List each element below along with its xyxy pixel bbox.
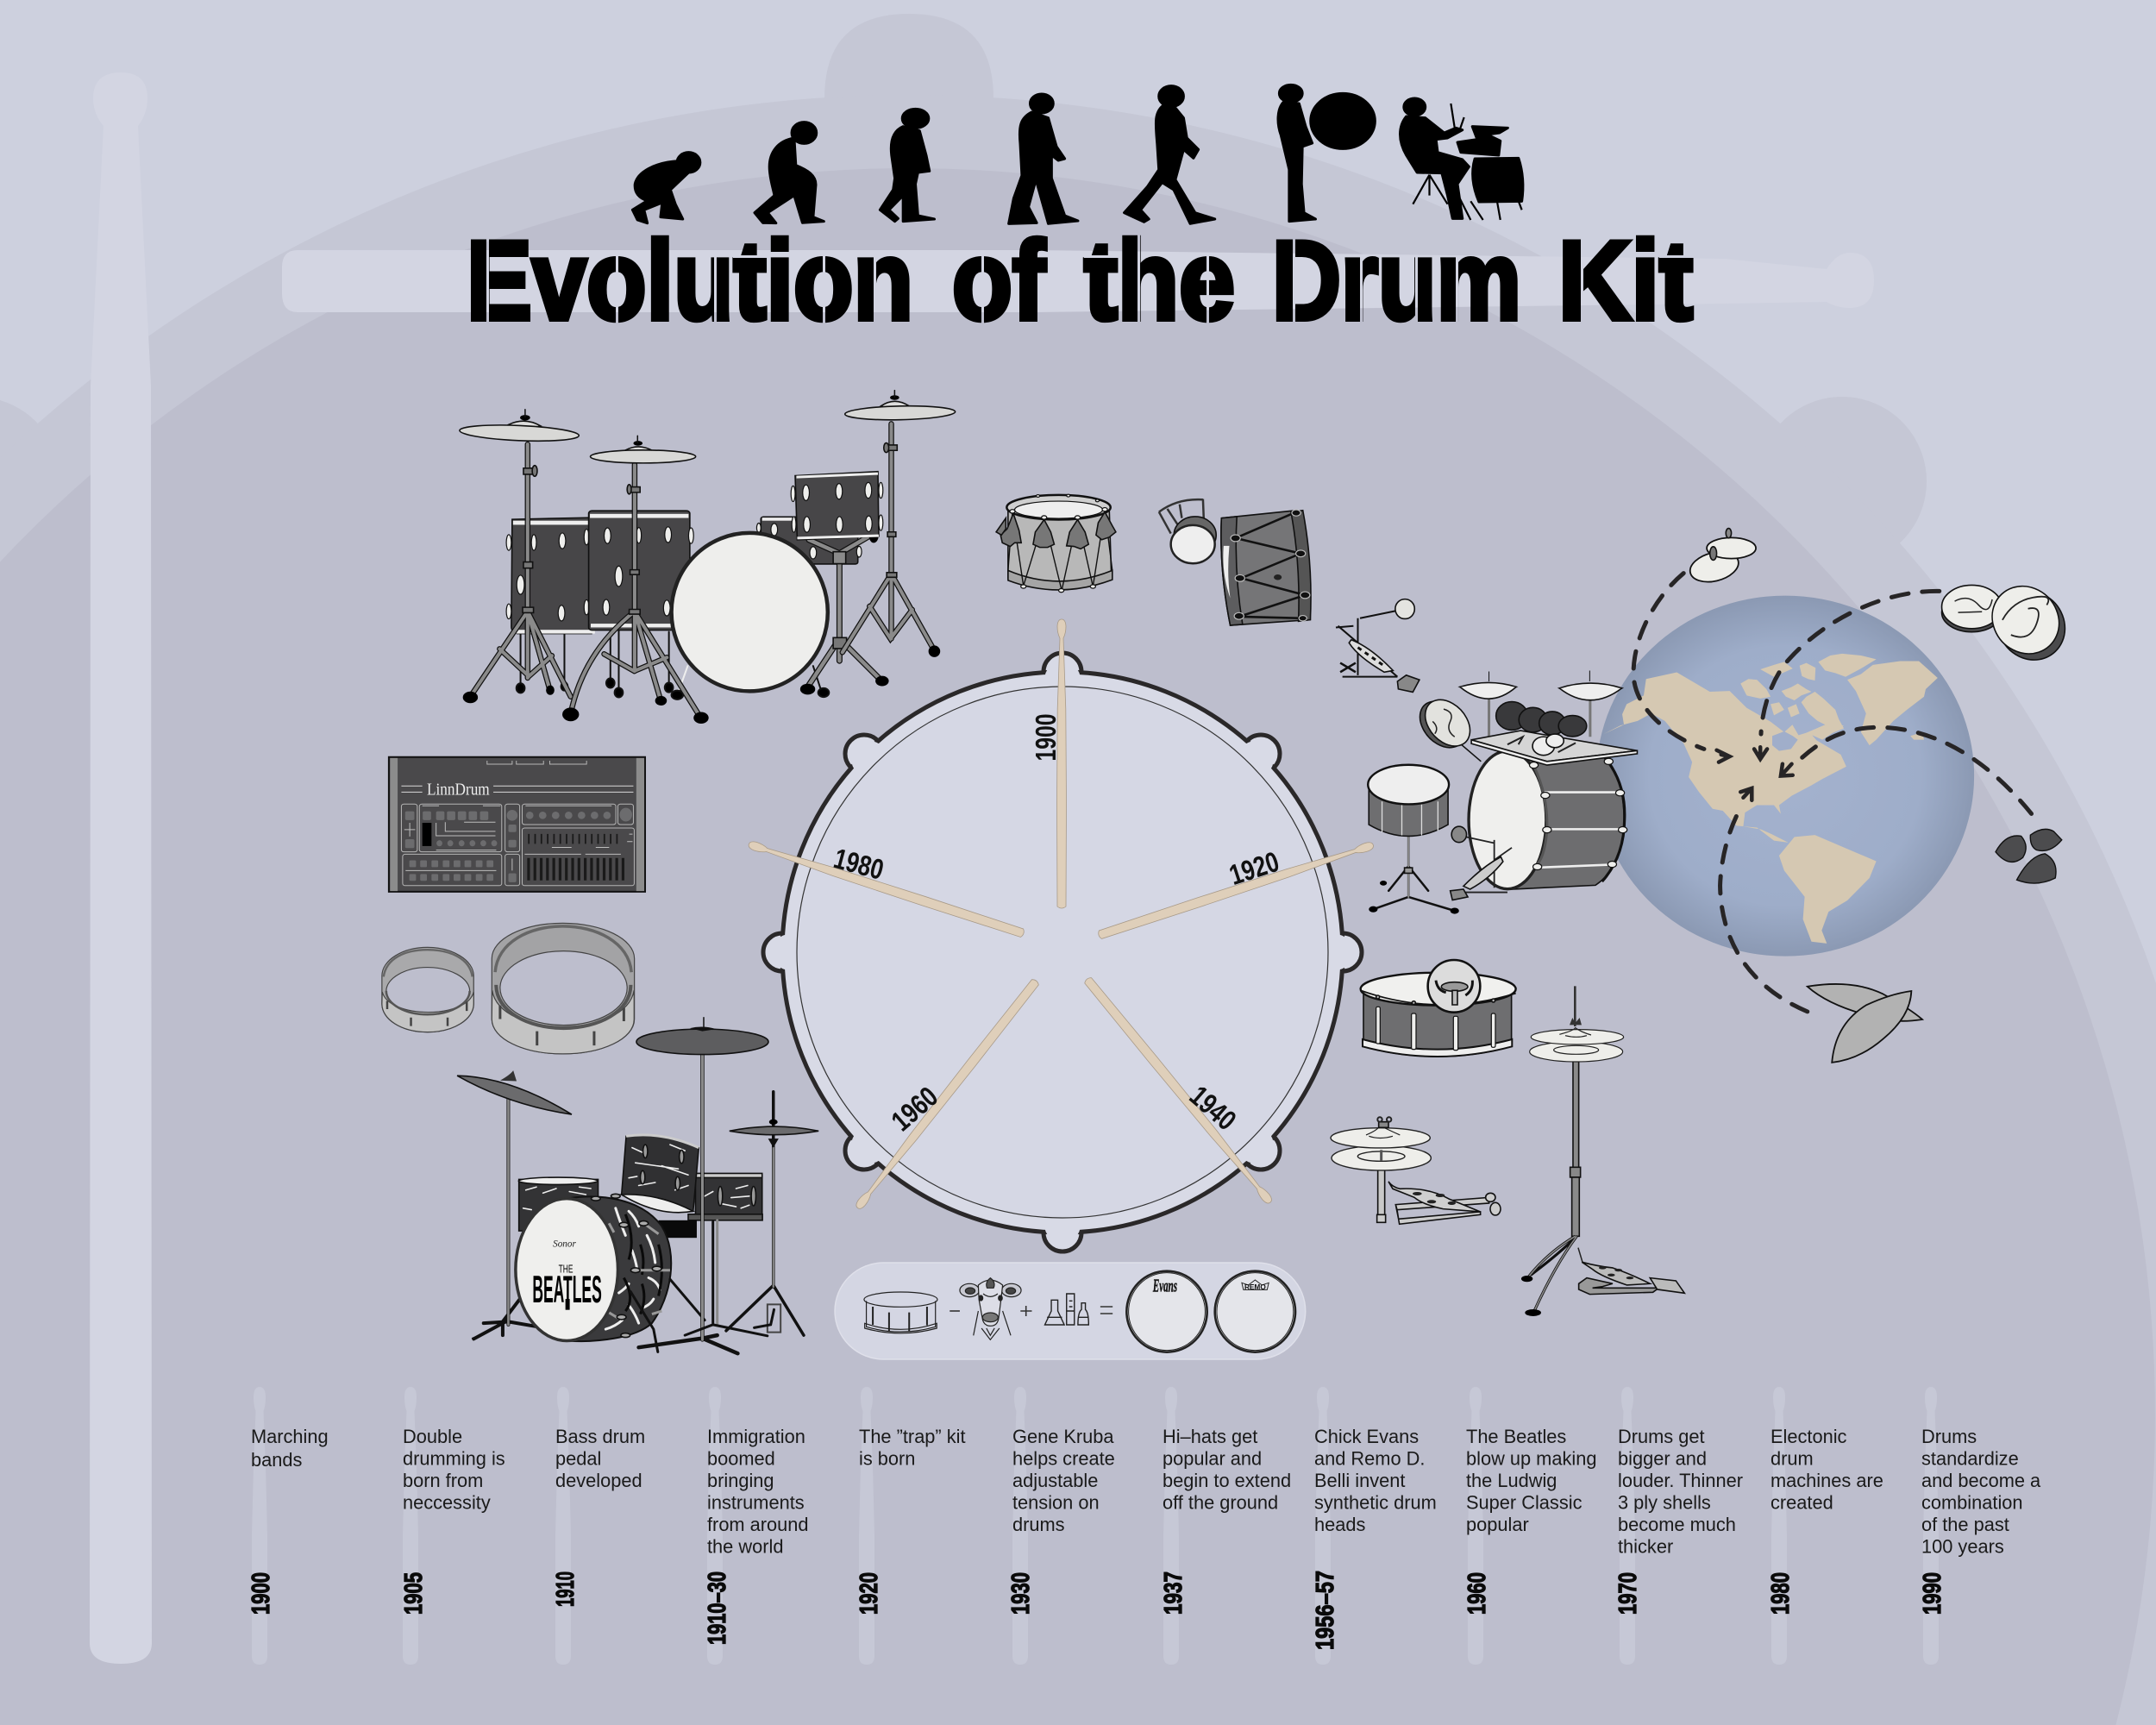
timeline item 1960: popular bbox=[1466, 1514, 1529, 1535]
equals bbox=[1100, 1307, 1112, 1314]
timeline item 1937: popular and bbox=[1163, 1447, 1262, 1470]
faded horizontal drumstick bbox=[282, 250, 1874, 312]
timeline item 1920: The ”trap” kit bbox=[859, 1426, 966, 1447]
icon: snare bbox=[864, 1292, 937, 1333]
pill background bbox=[835, 1263, 1306, 1359]
title: Drum bbox=[1272, 217, 1521, 343]
timeline item 1905: 1905 bbox=[400, 1572, 428, 1615]
bass drum pedal bbox=[1336, 599, 1420, 692]
timeline item 1910-30 bbox=[704, 1387, 809, 1665]
timeline item 1910-30: 1910–30 bbox=[704, 1571, 731, 1645]
bass drum shell bbox=[567, 1194, 705, 1352]
floor tom right bbox=[589, 511, 693, 630]
small drum bbox=[1171, 517, 1216, 563]
year label 1900: 1900 bbox=[1030, 714, 1062, 761]
drum skin bbox=[797, 687, 1328, 1218]
timeline item 1970: thicker bbox=[1618, 1535, 1673, 1558]
timeline item 1980 bbox=[1767, 1387, 1883, 1665]
title bbox=[471, 235, 1694, 323]
timeline item 1920: is born bbox=[859, 1447, 915, 1470]
synthetic heads equation bbox=[835, 1263, 1306, 1359]
timeline item 1920 bbox=[856, 1387, 966, 1665]
timeline item 1960 bbox=[1463, 1387, 1596, 1665]
timeline item 1960: 1960 bbox=[1463, 1572, 1491, 1615]
timeline item 1905: neccessity bbox=[403, 1492, 491, 1513]
tambourine coins bbox=[1942, 574, 2075, 672]
timeline item 1956-57: and Remo D. bbox=[1314, 1447, 1425, 1470]
icon: cow bbox=[960, 1278, 1021, 1339]
timeline item 1970: louder. Thinner bbox=[1618, 1470, 1743, 1491]
timeline item 1910-30: bringing bbox=[707, 1470, 774, 1491]
silhouette: seated kit drummer bbox=[1401, 98, 1523, 220]
year label 1980: 1980 bbox=[830, 842, 887, 886]
timeline item 1910 bbox=[552, 1387, 645, 1665]
stick 1900 bbox=[1057, 619, 1066, 908]
timeline item 1910-30: boomed bbox=[707, 1447, 775, 1470]
silhouette: early human bbox=[880, 109, 935, 222]
land: Greenland bbox=[1847, 661, 1938, 745]
timeline item 1990: and become a bbox=[1921, 1470, 2041, 1491]
small pedal on bass drum bbox=[1451, 826, 1512, 900]
trap kit bbox=[1368, 670, 1637, 914]
globe with immigration routes bbox=[1596, 529, 2075, 1063]
silhouette: marching bass drummer bbox=[1278, 85, 1375, 222]
timeline item 1956-57 bbox=[1312, 1387, 1437, 1665]
timeline item 1937: 1937 bbox=[1160, 1571, 1188, 1615]
snare on stand bbox=[1368, 765, 1459, 914]
faded vertical drumstick bbox=[90, 72, 152, 1664]
left cymbal and stand bbox=[457, 1070, 572, 1339]
timeline item 1980: created bbox=[1771, 1492, 1833, 1513]
gray cymbals bbox=[1808, 984, 1922, 1063]
icon: beakers bbox=[1045, 1294, 1088, 1325]
timeline item 1970: 3 ply shells bbox=[1618, 1492, 1711, 1513]
land: South America bbox=[1779, 835, 1877, 944]
timeline item 1960: the Ludwig bbox=[1466, 1470, 1557, 1491]
drum machine: LinnDrum bbox=[389, 757, 645, 892]
land: Arctic islands bbox=[1740, 654, 1877, 733]
timeline item 1910-30: the world bbox=[707, 1535, 783, 1558]
timeline item 1910: pedal bbox=[555, 1447, 601, 1470]
timeline item 1980: Electonic bbox=[1771, 1426, 1847, 1447]
timeline item 1990: combination bbox=[1921, 1492, 2023, 1513]
timeline item 1910-30: from around bbox=[707, 1514, 809, 1535]
cymbal stand right bbox=[843, 391, 956, 657]
woodblocks bbox=[1496, 702, 1587, 737]
tom stand bbox=[800, 526, 889, 694]
timeline item 1990: 100 years bbox=[1921, 1535, 2004, 1558]
timeline item 1905 bbox=[400, 1387, 505, 1665]
timeline item 1970 bbox=[1614, 1387, 1743, 1665]
cymbals on bass drum bbox=[1460, 670, 1622, 737]
drum kit: modern rock kit bbox=[459, 391, 956, 724]
timeline item 1910: Bass drum bbox=[555, 1426, 645, 1447]
ride cymbal and stand bbox=[636, 1018, 768, 1353]
rim lugs bbox=[763, 653, 1362, 1251]
right tom bbox=[659, 1173, 762, 1325]
drum head: Evans bbox=[1126, 1271, 1207, 1352]
timeline item 1900: 1900 bbox=[248, 1572, 275, 1615]
sliders bbox=[528, 834, 620, 844]
timeline item 1956-57: Chick Evans bbox=[1314, 1426, 1419, 1447]
timeline item 1970: Drums get bbox=[1618, 1426, 1705, 1447]
timeline item 1937: off the ground bbox=[1163, 1492, 1278, 1513]
timeline item 1937: Hi–hats get bbox=[1163, 1426, 1257, 1447]
timeline item 1910-30: Immigration bbox=[707, 1426, 805, 1447]
small shell ring bbox=[382, 947, 473, 1032]
title: Evolution bbox=[467, 217, 913, 343]
timeline item 1970: become much bbox=[1618, 1514, 1736, 1535]
castanets bbox=[1996, 829, 2062, 883]
table top with traps bbox=[1471, 731, 1637, 765]
timeline item 1920: 1920 bbox=[856, 1572, 883, 1615]
timeline item 1956-57: 1956–57 bbox=[1312, 1571, 1339, 1650]
route from gray cymbals bbox=[1720, 788, 1808, 1012]
chair bbox=[1159, 499, 1204, 534]
crash cymbal stand middle bbox=[562, 436, 709, 724]
timeline item 1905: drumming is bbox=[403, 1447, 505, 1470]
route from finger cymbals bbox=[1633, 574, 1730, 762]
hi-hat stand bbox=[1521, 986, 1684, 1316]
drum head: Remo: REMO bbox=[1244, 1283, 1266, 1291]
rope bass drum bbox=[1221, 510, 1311, 625]
timeline item 1910: 1910 bbox=[552, 1571, 580, 1607]
year label 1960: 1960 bbox=[885, 1080, 943, 1137]
large shell ring bbox=[492, 923, 635, 1054]
title: Kit bbox=[1558, 217, 1693, 343]
title: the bbox=[1084, 217, 1235, 343]
timeline item 1980: machines are bbox=[1771, 1470, 1883, 1491]
timeline bbox=[248, 1387, 2041, 1665]
land: North America bbox=[1603, 673, 1846, 843]
globe bbox=[1596, 596, 1974, 957]
timeline item 1990 bbox=[1919, 1387, 2041, 1665]
tensioned snare drum with key bbox=[1361, 960, 1516, 1057]
floor tom left bbox=[506, 518, 595, 634]
timeline item 1990: of the past bbox=[1921, 1514, 2009, 1535]
magnified tension key bbox=[1428, 960, 1480, 1013]
rack tom bbox=[791, 472, 883, 540]
logo text: LinnDrum bbox=[427, 780, 490, 799]
tambourine bbox=[1412, 695, 1481, 762]
timeline item 1930: Gene Kruba bbox=[1012, 1426, 1114, 1447]
timeline item 1905: Double bbox=[403, 1426, 462, 1447]
stick 1920 bbox=[1097, 840, 1375, 940]
stick 1940 bbox=[1083, 976, 1274, 1206]
timeline item 1956-57: heads bbox=[1314, 1514, 1365, 1535]
drum head: Evans: Evans bbox=[1152, 1276, 1177, 1295]
buttons bbox=[405, 808, 632, 882]
timeline item 1956-57: Belli invent bbox=[1314, 1470, 1405, 1491]
timeline item 1930: tension on bbox=[1012, 1492, 1100, 1513]
stick 1980 bbox=[748, 840, 1025, 938]
silhouette: crouching ape bbox=[632, 153, 700, 223]
silhouette: walking human bbox=[1125, 86, 1215, 223]
timeline item 1990: standardize bbox=[1921, 1447, 2019, 1470]
large bass drum bbox=[1469, 750, 1627, 889]
drum kit: Beatles kit bbox=[457, 1018, 818, 1353]
timeline item 1980: drum bbox=[1771, 1447, 1814, 1470]
silhouette: upright human bbox=[1009, 94, 1078, 223]
timeline item 1905: born from bbox=[403, 1470, 483, 1491]
stick 1960 bbox=[854, 978, 1040, 1211]
finger cymbals bbox=[1688, 529, 1756, 586]
evolution silhouettes bbox=[632, 85, 1523, 223]
drum kit: Beatles kit: BEATLES bbox=[532, 1267, 602, 1311]
double drumming: chair and bass drum bbox=[1159, 499, 1311, 625]
timeline item 1956-57: synthetic drum bbox=[1314, 1492, 1437, 1513]
timeline item 1900: Marching bbox=[251, 1426, 329, 1447]
minus bbox=[950, 1310, 960, 1312]
hi-hat and stand bbox=[726, 1092, 818, 1335]
center drum head timeline bbox=[748, 619, 1375, 1251]
timeline item 1910-30: instruments bbox=[707, 1492, 805, 1513]
small back tom bbox=[756, 517, 862, 564]
timeline item 1930 bbox=[1007, 1387, 1115, 1665]
timeline item 1980: 1980 bbox=[1767, 1572, 1795, 1615]
drum hoop bbox=[782, 672, 1343, 1233]
route from tambourine coins bbox=[1754, 591, 1940, 759]
silhouette: stooped ape bbox=[755, 122, 824, 223]
timeline item 1970: 1970 bbox=[1614, 1572, 1642, 1615]
timeline item 1937: begin to extend bbox=[1163, 1470, 1291, 1491]
timeline item 1960: The Beatles bbox=[1466, 1426, 1566, 1447]
year label 1940: 1940 bbox=[1184, 1079, 1243, 1136]
timeline item 1900 bbox=[248, 1387, 329, 1665]
back legs bbox=[517, 564, 829, 699]
timeline item 1930: adjustable bbox=[1012, 1470, 1098, 1491]
timeline item 1990: Drums bbox=[1921, 1426, 1977, 1447]
marching snare drum bbox=[996, 494, 1116, 593]
timeline item 1900: bands bbox=[251, 1449, 302, 1471]
timeline item 1910: developed bbox=[555, 1470, 642, 1491]
timeline item 1937 bbox=[1160, 1387, 1291, 1665]
bass drum bbox=[672, 533, 828, 691]
low-boy hi-hat bbox=[1331, 1117, 1501, 1224]
left floor tom bbox=[518, 1177, 599, 1231]
bass drum head with Beatles logo: Sonor bbox=[553, 1238, 576, 1250]
bass drum head with Beatles logo bbox=[516, 1199, 617, 1340]
land: Hudson Bay bbox=[1772, 731, 1798, 751]
year label 1920: 1920 bbox=[1225, 845, 1282, 891]
timeline item 1990: 1990 bbox=[1919, 1572, 1946, 1615]
timeline item 1960: Super Classic bbox=[1466, 1492, 1583, 1513]
land: Iceland bbox=[1910, 732, 1924, 740]
crash cymbal stand left bbox=[459, 410, 580, 703]
timeline item 1970: bigger and bbox=[1618, 1447, 1707, 1470]
timeline item 1930: 1930 bbox=[1007, 1572, 1035, 1615]
timeline item 1930: drums bbox=[1012, 1514, 1065, 1535]
timeline item 1960: blow up making bbox=[1466, 1447, 1596, 1470]
timeline item 1930: helps create bbox=[1012, 1447, 1115, 1470]
plus bbox=[1020, 1306, 1031, 1316]
rack tom bbox=[622, 1135, 699, 1213]
drum head: Remo bbox=[1215, 1271, 1295, 1352]
bass drum head with Beatles logo: THE bbox=[559, 1262, 573, 1275]
route from castanets bbox=[1781, 727, 2032, 813]
title: of bbox=[952, 217, 1046, 343]
drum shell rings bbox=[382, 923, 635, 1054]
